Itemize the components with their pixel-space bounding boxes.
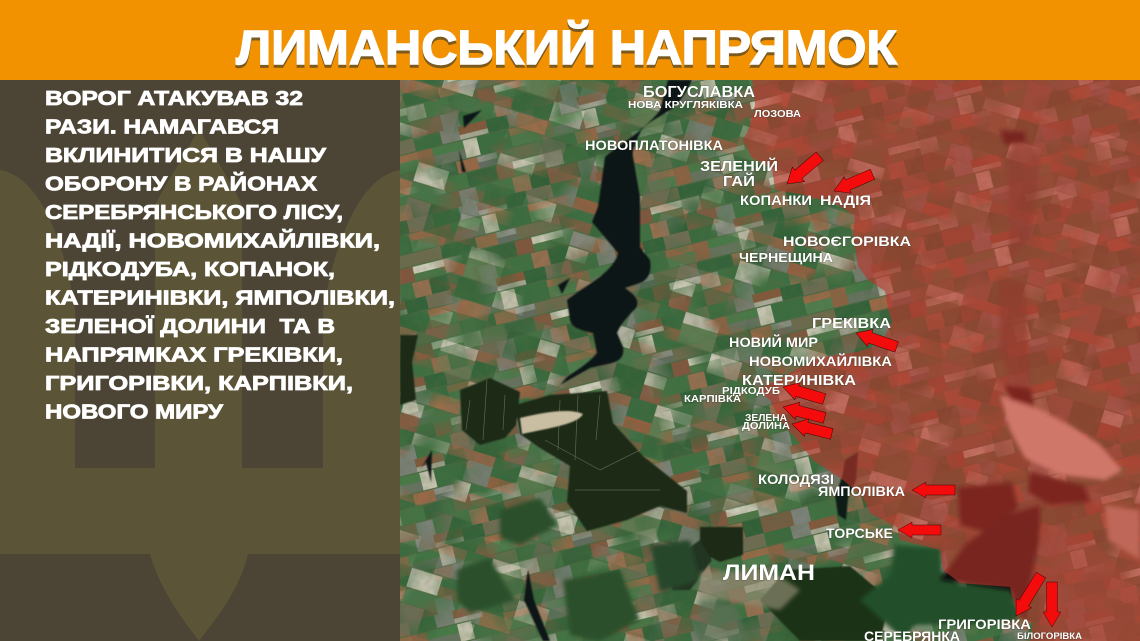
- place labels: БОГУСЛАВКА: [643, 84, 755, 101]
- place labels: КАРПІВКА: [684, 393, 741, 405]
- text block: enemy attacks summary: [45, 88, 395, 424]
- place labels: НОВА КРУГЛЯКІВКА: [628, 99, 743, 111]
- text block: enemy attacks summary: ВКЛИНИТИСЯ В НАШУ: [45, 145, 327, 167]
- town of Lyman: [700, 570, 800, 610]
- text block: enemy attacks summary: ЗЕЛЕНОЇ ДОЛИНИ ТА В: [45, 315, 335, 338]
- title: ЛИМАНСЬКИЙ НАПРЯМОК: [236, 23, 898, 78]
- place labels: КАТЕРИНІВКА: [742, 372, 856, 389]
- text block: enemy attacks summary: НАДІЇ, НОВОМИХАЙЛІВКИ,: [45, 228, 380, 252]
- arrows: attack directions: [780, 149, 1061, 627]
- text block: enemy attacks summary: ГРИГОРІВКИ, КАРПІВКИ,: [45, 373, 353, 395]
- dark pine forests: [400, 335, 890, 641]
- text block: enemy attacks summary: КАТЕРИНІВКИ, ЯМПОЛІВКИ,: [45, 288, 395, 310]
- text block: enemy attacks summary: РАЗИ. НАМАГАВСЯ: [45, 116, 279, 138]
- arrow: towards Torske: [898, 522, 941, 538]
- place labels: НАДІЯ: [820, 192, 871, 208]
- farmland fields: [400, 80, 1140, 641]
- place labels: НОВОМИХАЙЛІВКА: [749, 352, 892, 369]
- forest cut lines: [466, 380, 660, 490]
- arrow: towards Zelena Dolyna south: [792, 418, 834, 440]
- text block: enemy attacks summary: ОБОРОНУ В РАЙОНАХ: [45, 172, 318, 196]
- icon: trident watermark: [0, 128, 400, 641]
- arrow: towards Ridkodub: [782, 382, 826, 405]
- place labels: ЛИМАН: [723, 560, 815, 585]
- arrow: towards Zelena Dolyna north: [782, 402, 826, 424]
- place labels: ДОЛИНА: [742, 421, 790, 432]
- place labels: [585, 84, 1083, 641]
- place labels: ГАЙ: [723, 172, 755, 190]
- place labels: НОВИЙ МИР: [729, 333, 818, 350]
- place labels: БІЛОГОРІВКА: [1017, 631, 1083, 641]
- sand clearing: [520, 411, 583, 434]
- place labels: ГРИГОРІВКА: [938, 616, 1031, 632]
- place labels: НОВОПЛАТОНІВКА: [585, 137, 723, 153]
- arrow: towards Bilohorivka: [1043, 582, 1061, 627]
- place labels: КОЛОДЯЗІ: [758, 471, 834, 487]
- place labels: ЧЕРНЕЩИНА: [739, 250, 834, 265]
- arrow: towards Nadiia: [834, 168, 875, 194]
- place labels: ЗЕЛЕНИЙ: [700, 157, 778, 175]
- text block: enemy attacks summary: ВОРОГ АТАКУВАВ 32: [45, 88, 303, 110]
- green woodland: [457, 498, 1018, 641]
- eastern terrain below the overlay: [940, 125, 1140, 641]
- arrow: towards Hryhorivka: [1016, 572, 1046, 616]
- place labels: ЗЕЛЕНА: [745, 413, 787, 424]
- text block: enemy attacks summary: НАПРЯМКАХ ГРЕКІВКИ,: [45, 344, 343, 366]
- place labels: ТОРСЬКЕ: [826, 525, 893, 541]
- place labels: НОВОЄГОРІВКА: [783, 233, 911, 249]
- place labels: ЛОЗОВА: [754, 109, 801, 120]
- place labels: ГРЕКІВКА: [812, 315, 891, 332]
- text block: enemy attacks summary: РІДКОДУБА, КОПАНОК,: [45, 259, 335, 281]
- dark river near front line: [835, 452, 858, 520]
- place labels: КОПАНКИ: [740, 192, 812, 208]
- title: ЛИМАНСЬКИЙ НАПРЯМОК: [236, 20, 898, 75]
- text block: enemy attacks summary: НОВОГО МИРУ: [45, 402, 224, 424]
- panel: left summary: [0, 80, 400, 641]
- map: satellite view: [400, 80, 1140, 641]
- arrow: towards Zelenyi Hai: [786, 152, 824, 184]
- arrow: towards Hrekivka: [856, 329, 899, 352]
- text block: enemy attacks summary: СЕРЕБРЯНСЬКОГО ЛІСУ,: [45, 202, 343, 224]
- arrow: towards Yampolivka: [912, 482, 955, 498]
- reservoir and river: [420, 80, 692, 641]
- place labels: РІДКОДУБ: [722, 385, 780, 397]
- place labels: ЯМПОЛІВКА: [818, 483, 905, 499]
- header bar: [0, 0, 1140, 80]
- occupied territory overlay: [743, 80, 1140, 641]
